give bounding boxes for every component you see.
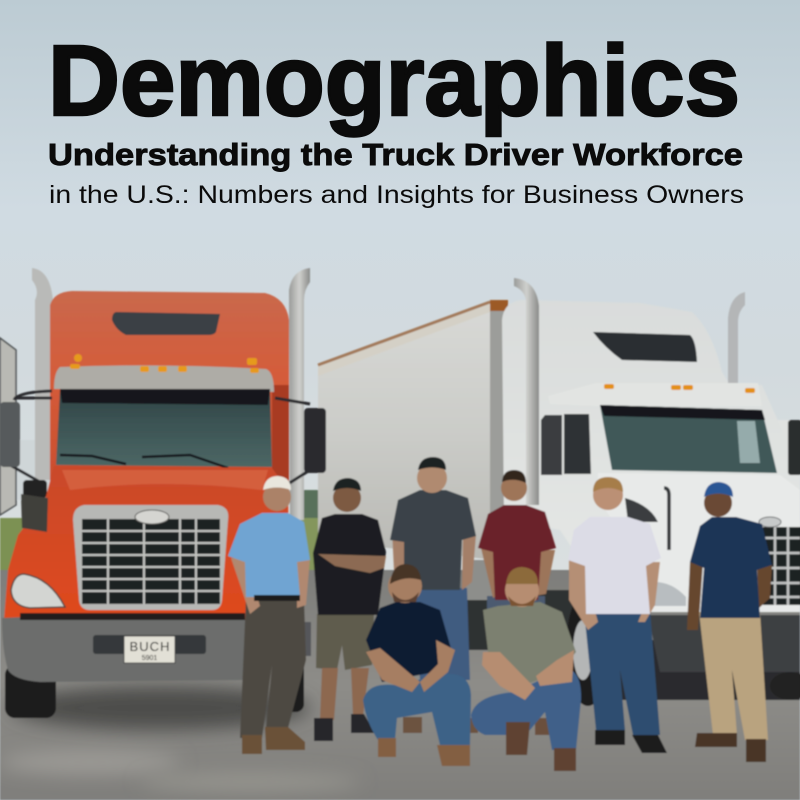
- front wheel: [566, 590, 610, 706]
- person: blue polo: [228, 476, 310, 754]
- windshield: [56, 389, 272, 467]
- license plate: BUCH: [130, 639, 170, 654]
- rear exhaust stack: [728, 292, 745, 386]
- box trailer: [318, 300, 508, 560]
- under-trailer shadow: [466, 590, 586, 650]
- bumper top shadow: [20, 613, 245, 620]
- rear bumper piece: [304, 622, 311, 656]
- sun visor: [54, 365, 274, 392]
- wipers: [60, 455, 228, 468]
- hood: [4, 466, 290, 620]
- windshield: [600, 405, 777, 473]
- sun visor: [548, 383, 762, 406]
- bumper: [2, 615, 245, 682]
- person: maroon polo: [478, 470, 556, 735]
- parking lot ground: [0, 570, 800, 800]
- bumper: [648, 615, 800, 672]
- door window: [563, 413, 592, 475]
- bumper slot: [93, 635, 206, 654]
- cab side strip: [272, 385, 289, 485]
- title: Demographics: [48, 25, 740, 137]
- amber roof lights: [604, 384, 755, 393]
- rear wheel: [285, 660, 304, 712]
- grille: [763, 527, 800, 605]
- person: white polo: [568, 477, 667, 753]
- person: navy polo and khakis: [687, 482, 772, 762]
- left exhaust stack: [32, 268, 53, 480]
- cab: [50, 291, 289, 500]
- hood emblem: [135, 510, 169, 524]
- under-cab shadow: [590, 640, 800, 700]
- license plate: [124, 636, 175, 663]
- roof window: [593, 332, 697, 362]
- trailer skirt: [466, 560, 520, 600]
- roof window: [112, 312, 220, 335]
- hood vent: [625, 498, 658, 522]
- white truck with box trailer: [318, 278, 800, 706]
- white truck hood: [598, 473, 800, 612]
- mirrors and arms: [0, 391, 326, 498]
- amber roof lights: [70, 354, 259, 373]
- grille: [73, 505, 228, 610]
- license plate: 5901: [142, 655, 157, 662]
- partial trailer at left edge: [0, 338, 16, 515]
- distant building: [762, 420, 800, 490]
- right exhaust stack: [289, 268, 310, 520]
- mirrors: [541, 415, 800, 475]
- front wheel: [5, 665, 56, 718]
- person: tall dark polo: [390, 457, 478, 733]
- subtitle: Understanding the Truck Driver Workforce: [48, 137, 743, 172]
- sky background: [0, 0, 800, 600]
- tagline: in the U.S.: Numbers and Insights for Business Owners: [49, 181, 744, 209]
- white cab: [502, 300, 800, 610]
- side turn signal: [21, 494, 48, 532]
- right wheel: [770, 672, 800, 700]
- hood handle: [664, 488, 669, 550]
- headlight: [652, 582, 686, 606]
- person: navy polo arms crossed: [313, 478, 386, 741]
- background trees and grass: [0, 440, 330, 600]
- headlight: [11, 574, 65, 608]
- hood emblem: [759, 517, 781, 527]
- red truck: [0, 268, 326, 718]
- front exhaust stack: [514, 278, 539, 505]
- person: kneeling olive polo: [471, 567, 581, 771]
- hood highlight: [62, 470, 268, 490]
- person: kneeling navy polo: [363, 564, 471, 766]
- photo scene: [0, 268, 800, 800]
